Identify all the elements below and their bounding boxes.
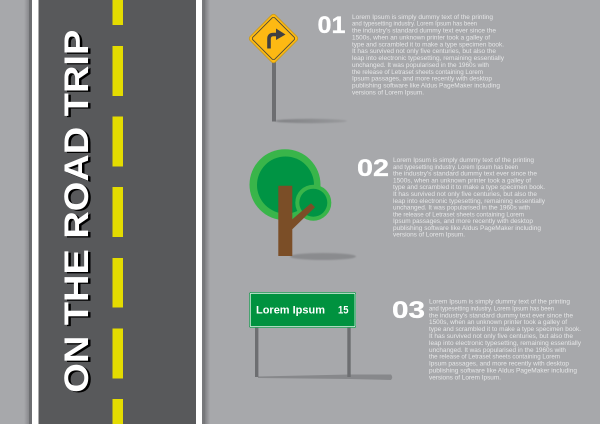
- text block 1: and typesetting industry. Lorem Ipsum has been: [352, 21, 477, 28]
- icon: road sign: Lorem Ipsum: [256, 304, 325, 316]
- text block 3: publishing software like Aldus PageMaker including: [429, 368, 577, 374]
- number 03: 03: [392, 297, 425, 324]
- text block 2: Ipsum passages, and more recently with desktop: [393, 218, 534, 225]
- text block 3: type and scrambled it to make a type specimen book.: [429, 326, 581, 333]
- text block 1: It has survived not only five centuries, but also the: [352, 48, 497, 55]
- text block 1: the industry's standard dummy text ever since the: [352, 28, 497, 35]
- text block 2: versions of Lorem Ipsum.: [393, 232, 465, 239]
- text block 3: leap into electronic typesetting, remaining essentially: [429, 340, 582, 347]
- text block 2: [393, 157, 546, 239]
- text block 2: It has survived not only five centuries, but also the: [393, 191, 538, 198]
- number 02: 02: [357, 155, 389, 182]
- text block 3: It has survived not only five centuries, but also the: [429, 333, 574, 340]
- text block 3: and typesetting industry. Lorem Ipsum has been: [429, 305, 554, 312]
- text block 1: Ipsum passages, and more recently with desktop: [352, 76, 493, 83]
- text block 2: the release of Letraset sheets containing Lorem: [393, 211, 524, 218]
- number 01: 01: [318, 12, 346, 39]
- text block 3: [429, 298, 582, 381]
- icon: turn sign: [248, 13, 347, 123]
- text block 2: unchanged. It was popularised in the 1960s with: [393, 204, 530, 212]
- text block 2: Lorem Ipsum is simply dummy text of the printing: [393, 157, 534, 164]
- text block 1: leap into electronic typesetting, remaining essentially: [352, 55, 505, 62]
- text block 1: [352, 14, 505, 96]
- text block 2: and typesetting industry. Lorem Ipsum has been: [393, 164, 518, 171]
- text block 1: type and scrambled it to make a type specimen book.: [352, 41, 504, 48]
- text block 3: the industry's standard dummy text ever since the: [429, 312, 574, 319]
- text block 3: versions of Lorem Ipsum.: [429, 374, 501, 381]
- text block 1: publishing software like Aldus PageMaker including: [352, 83, 500, 90]
- icon: road sign: 15: [338, 304, 348, 316]
- title: ON THE ROAD TRIP: [60, 31, 98, 394]
- text block 2: publishing software like Aldus PageMaker including: [393, 225, 541, 232]
- text block 2: type and scrambled it to make a type specimen book.: [393, 184, 545, 191]
- text block 1: the release of Letraset sheets containing Lorem: [352, 69, 483, 76]
- text block 3: unchanged. It was popularised in the 1960s with: [429, 347, 566, 354]
- icon: tree: [250, 149, 356, 260]
- text block 3: Ipsum passages, and more recently with desktop: [429, 361, 570, 368]
- text block 1: versions of Lorem Ipsum.: [352, 90, 424, 96]
- text block 1: unchanged. It was popularised in the 1960s with: [352, 62, 489, 69]
- road centre dashes: [112, 0, 123, 424]
- title: ON THE ROAD TRIP: [58, 30, 96, 393]
- text block 3: the release of Letraset sheets containing Lorem: [429, 354, 560, 361]
- text block 3: Lorem Ipsum is simply dummy text of the printing: [429, 298, 570, 306]
- text block 3: 1500s, when an unknown printer took a galley of: [429, 319, 567, 326]
- road: [24, 0, 210, 424]
- text block 2: leap into electronic typesetting, remaining essentially: [393, 198, 546, 205]
- text block 2: 1500s, when an unknown printer took a galley of: [393, 177, 531, 184]
- text block 1: Lorem Ipsum is simply dummy text of the printing: [352, 14, 493, 21]
- text block 2: the industry's standard dummy text ever since the: [393, 171, 538, 178]
- icon: road sign: [249, 292, 392, 380]
- text block 1: 1500s, when an unknown printer took a galley of: [352, 34, 490, 42]
